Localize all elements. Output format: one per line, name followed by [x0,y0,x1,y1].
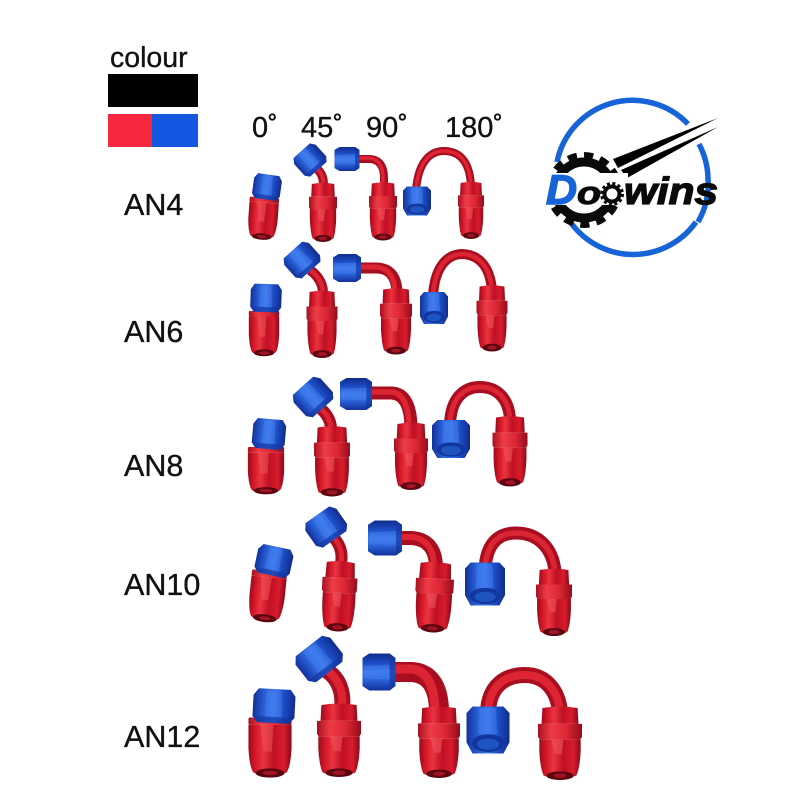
logo wordmark: D [546,166,577,213]
fitting AN8 0 degree [248,418,287,494]
logo wordmark: o [577,175,601,211]
fitting AN12 45 degree [292,632,361,777]
fitting AN8 180 degree [432,387,528,486]
fitting AN12 90 degree [362,654,460,778]
fitting AN12 0 degree [248,688,296,778]
fitting AN10 180 degree [465,533,572,636]
fitting AN6 45 degree [281,239,338,358]
fitting AN6 180 degree [420,254,508,352]
angle headers: 90˚ [366,112,408,144]
size label AN4: AN4 [124,188,183,222]
logo streaks [613,118,718,178]
colour swatch: red and blue [108,114,198,147]
fitting AN6 90 degree [333,254,412,354]
fitting AN10 45 degree [302,504,358,632]
logo wordmark [546,166,718,213]
fitting AN8 90 degree [340,378,428,490]
fitting AN8 45 degree [290,374,350,496]
size label AN8: AN8 [124,449,183,483]
logo text backing [544,173,628,205]
logo: Doowins [544,100,718,254]
colour legend heading: colour [110,42,188,74]
size label AN6: AN6 [124,315,183,349]
fitting AN4 180 degree [403,151,484,239]
fitting AN4 45 degree [291,141,337,242]
angle headers: 45˚ [301,112,343,144]
fitting AN12 180 degree [466,675,582,780]
logo gear [550,156,618,224]
colour swatch: black [108,74,198,107]
size label AN10: AN10 [124,568,200,602]
logo ring [557,100,708,254]
fitting AN10 90 degree [368,520,455,633]
size label AN12: AN12 [124,720,200,754]
fitting AN4 90 degree [334,147,397,240]
logo small gear [602,184,622,204]
logo wordmark: wins [624,171,718,213]
fitting AN6 0 degree [249,283,282,356]
fitting AN4 0 degree [247,173,283,241]
fitting AN10 0 degree [247,543,295,624]
angle headers [252,112,503,144]
angle headers: 180˚ [445,112,503,144]
angle headers: 0˚ [252,112,278,144]
